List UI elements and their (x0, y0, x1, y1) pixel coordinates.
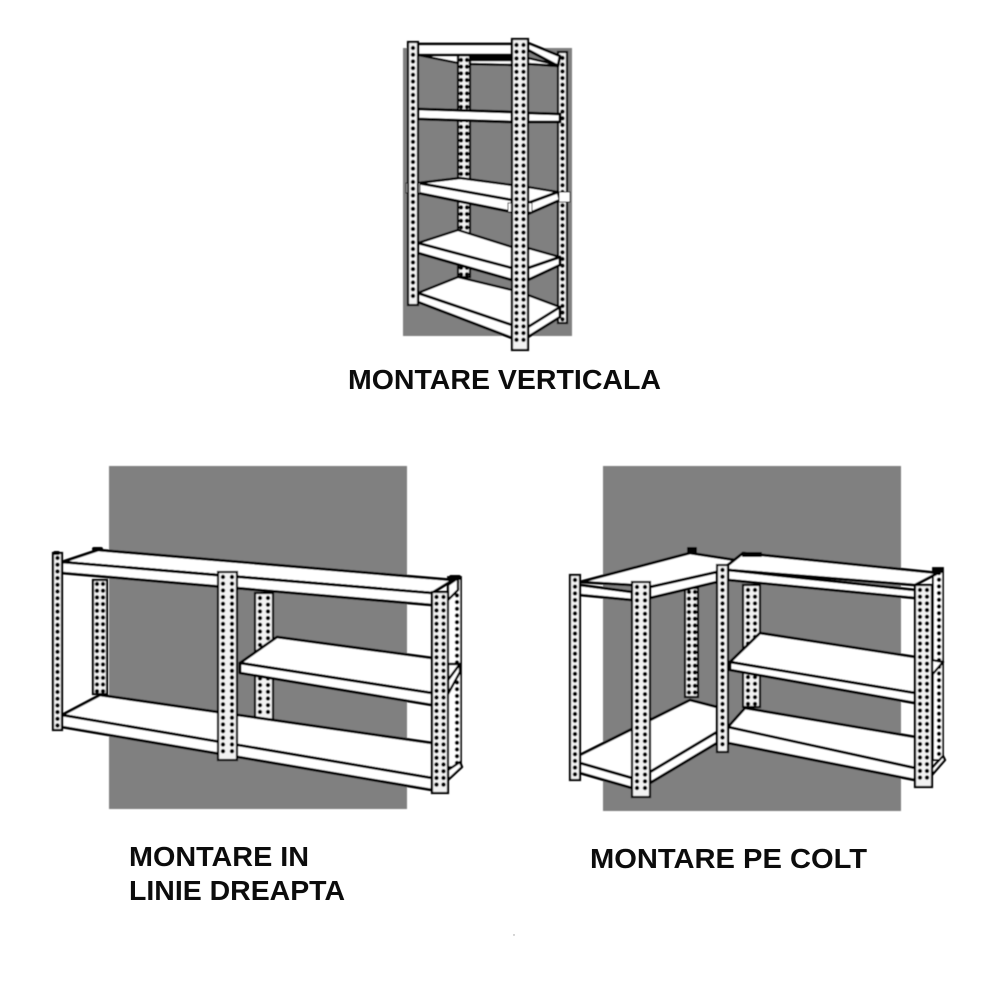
back post: left unit (685, 588, 698, 697)
bottom shelf (62, 695, 462, 790)
back post: inner (458, 55, 470, 277)
back post: right (448, 577, 461, 767)
front post: main (512, 39, 528, 350)
heading: corner mounting: MONTARE PE COLT (590, 843, 867, 874)
wall background: straight (109, 466, 407, 809)
fourth shelf (418, 230, 560, 280)
front post: middle (218, 572, 237, 760)
front post: far left (570, 575, 580, 780)
heading: straight line mounting, second line: LINIE DREAPTA (129, 875, 345, 906)
back post: right unit (743, 585, 760, 707)
wall background: corner (603, 466, 901, 811)
right unit: middle shelf (730, 633, 943, 703)
top shelf (62, 550, 458, 605)
middle shelf (240, 637, 460, 705)
right unit: top shelf (728, 553, 938, 598)
left unit: bottom shelf (580, 700, 717, 788)
front post: right (432, 592, 448, 793)
front post: centre (717, 565, 728, 752)
back post: second (255, 593, 273, 720)
front post: left unit corner (632, 582, 650, 797)
heading: straight line mounting: MONTARE IN (129, 841, 309, 872)
front post: left (408, 42, 418, 305)
connector brackets (406, 183, 570, 212)
post caps (53, 547, 461, 580)
panel: corner mounting (570, 466, 945, 811)
front post: right unit (915, 585, 932, 787)
second shelf (418, 109, 560, 122)
third shelf (418, 178, 560, 214)
front post: left (53, 553, 62, 730)
back post: first (93, 580, 107, 694)
right unit: bottom shelf (728, 708, 945, 780)
heading: vertical mounting: MONTARE VERTICALA (348, 364, 661, 395)
wall background: vertical (403, 48, 572, 336)
left unit: top shelf (580, 553, 735, 600)
top shelf (418, 43, 560, 66)
back post: far right (933, 568, 943, 760)
speck near bottom (513, 934, 515, 936)
back post: right (558, 52, 567, 323)
bottom shelf (418, 277, 560, 338)
post caps (687, 547, 943, 573)
panel: straight line mounting (53, 466, 462, 809)
panel: vertical shelf unit (403, 39, 572, 350)
